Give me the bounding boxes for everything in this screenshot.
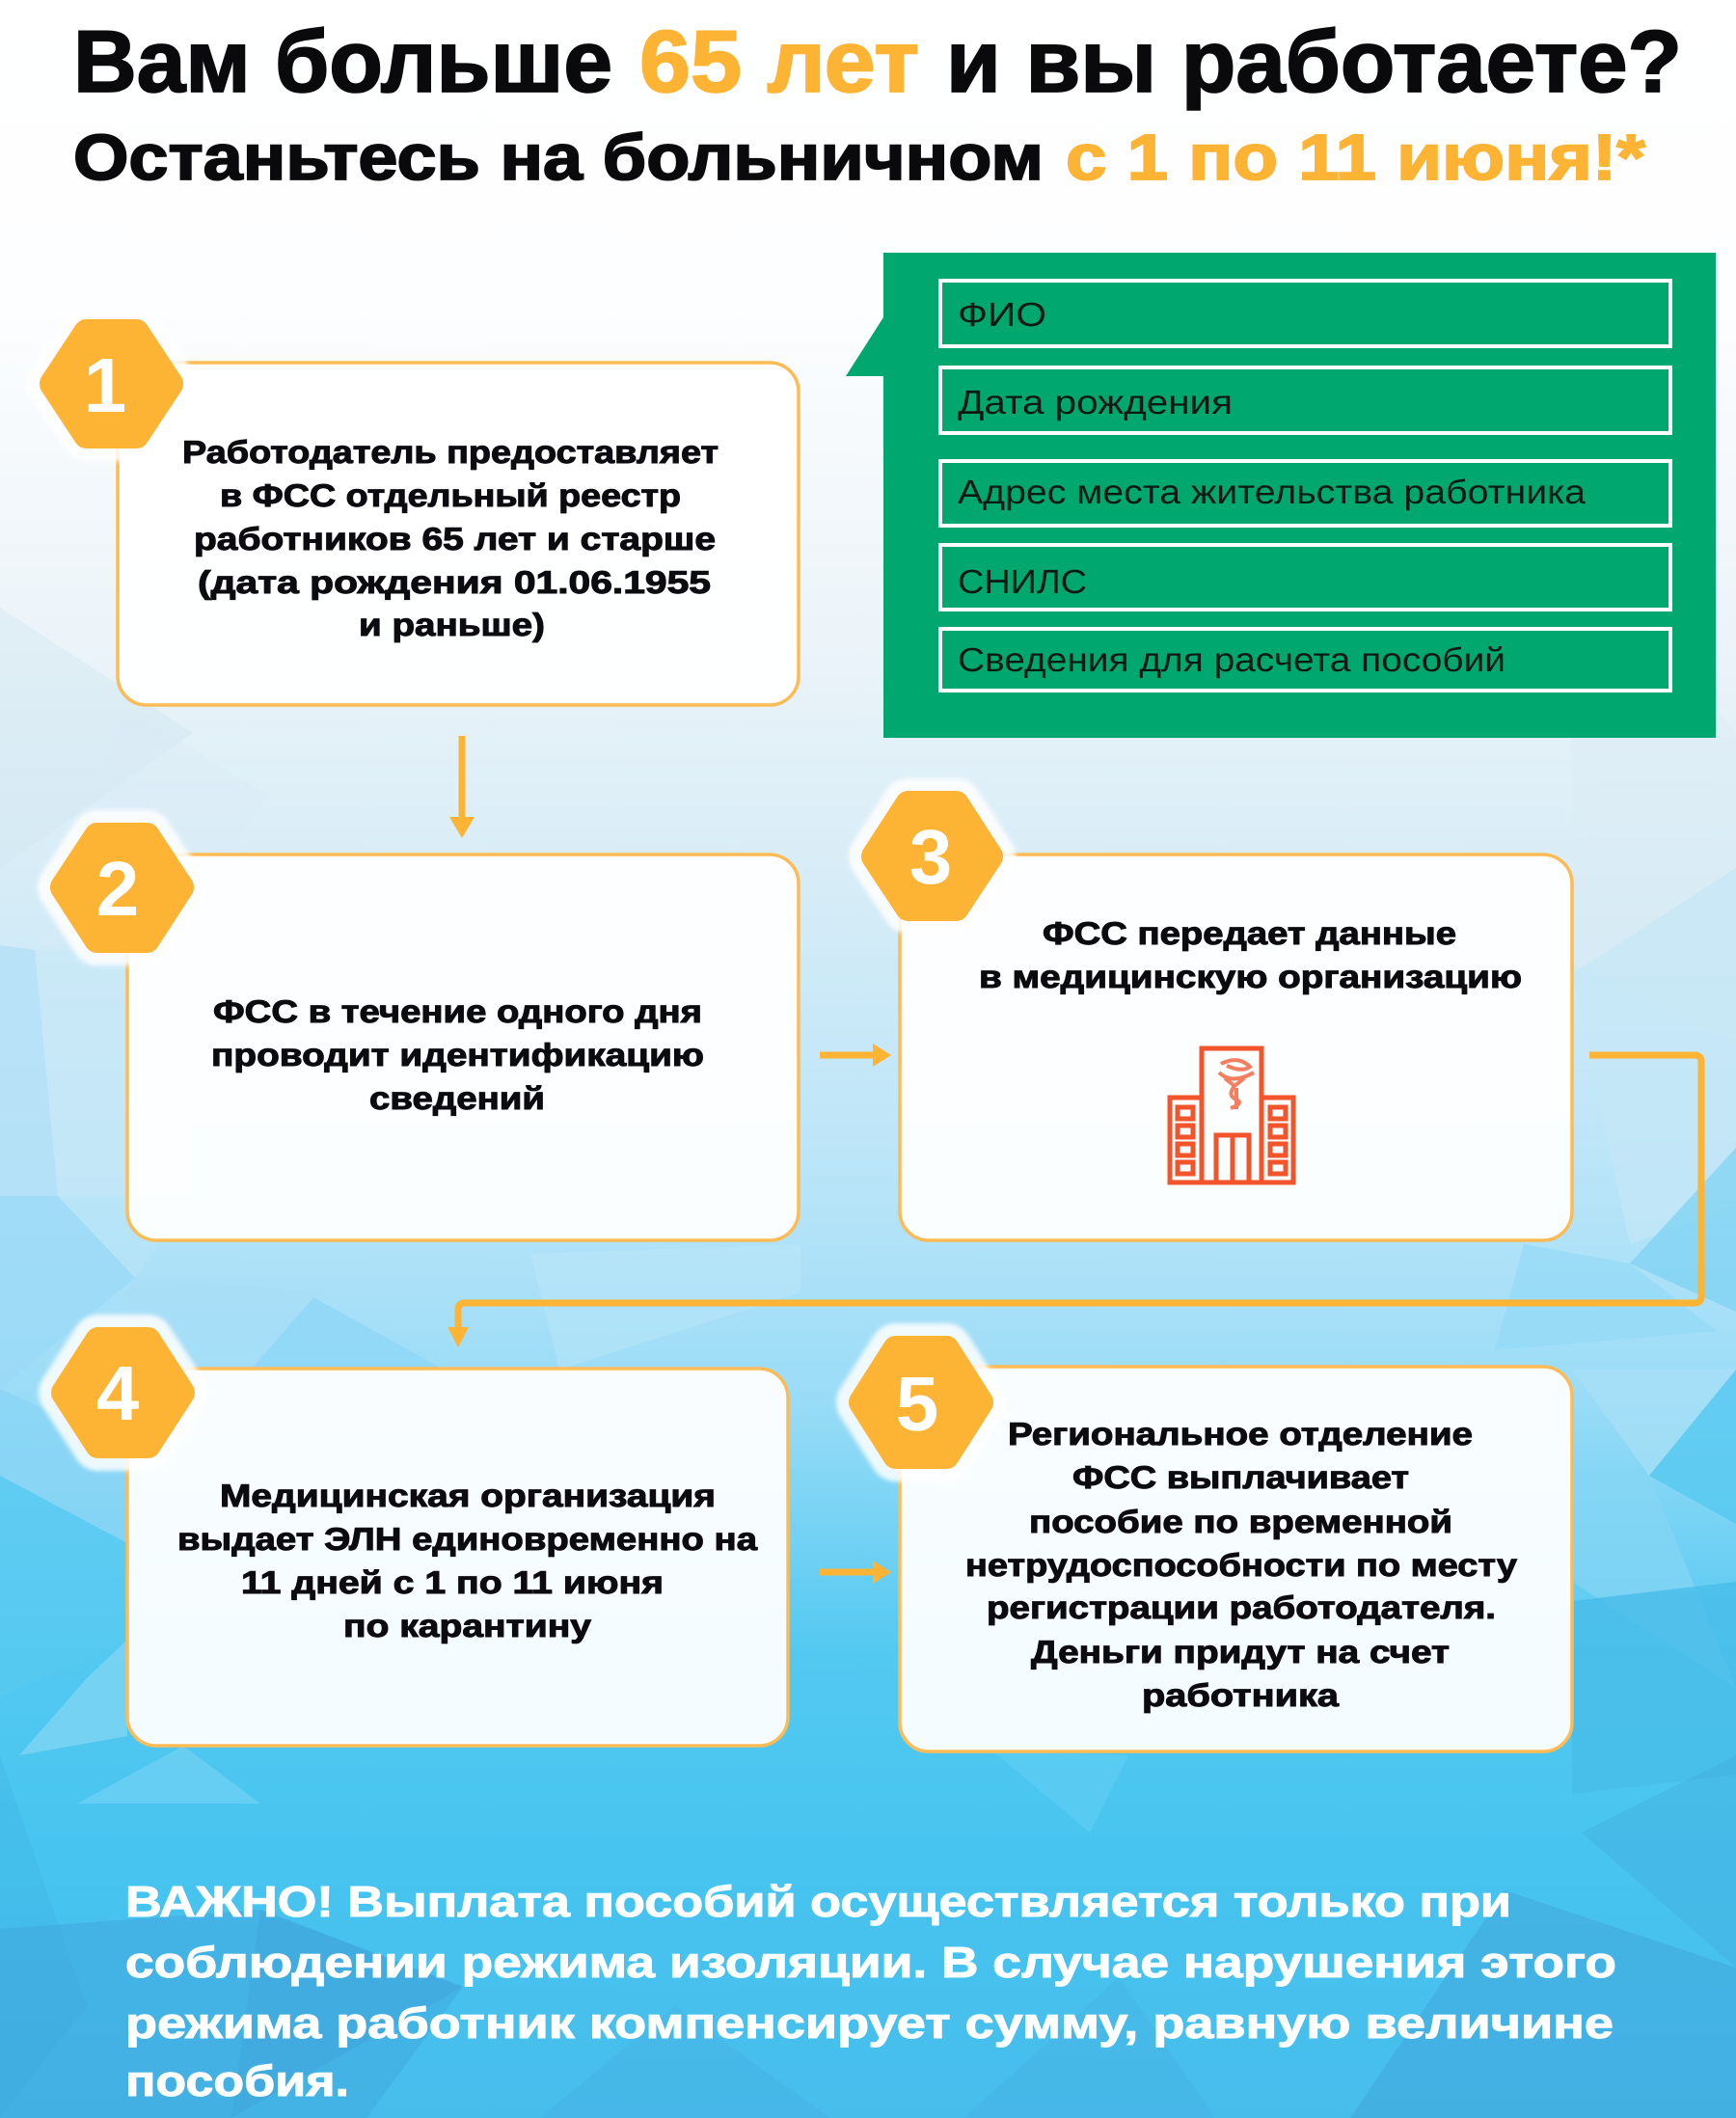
badge 4: 4 — [96, 1350, 140, 1436]
step 4 text: выдает ЭЛН единовременно на — [177, 1521, 758, 1557]
step 3 text — [979, 915, 1522, 994]
step 5 text: работника — [1142, 1677, 1340, 1713]
field: ФИО: ФИО — [958, 296, 1046, 334]
step 5 text: Региональное отделение — [1008, 1416, 1473, 1452]
step 1 text — [182, 434, 719, 642]
step 1 text: работников 65 лет и старше — [194, 521, 716, 557]
heading line 1: и вы работаете? — [946, 14, 1682, 111]
panel: step 5 — [862, 1349, 1572, 1751]
field: benefit details: Сведения для расчета пособий — [958, 641, 1505, 679]
step 4 text — [177, 1478, 758, 1643]
step 4 text: по карантину — [343, 1608, 592, 1643]
heading line 2: с 1 по 11 июня!* — [1066, 122, 1646, 194]
field: date of birth: Дата рождения — [958, 384, 1233, 421]
step 1 text: и раньше) — [359, 607, 545, 642]
field: date of birth — [940, 367, 1670, 433]
badge 3: 3 — [909, 814, 952, 900]
field: ФИО — [940, 281, 1670, 346]
heading line 1 — [73, 14, 1682, 111]
arrow: step 3 to 4 — [448, 1055, 1701, 1347]
step 2 text: ФСС в течение одного дня — [213, 993, 702, 1029]
step 3 text: ФСС передает данные — [1043, 915, 1456, 951]
heading line 2 — [73, 122, 1646, 194]
step 5 text: регистрации работодателя. — [987, 1589, 1496, 1625]
panel: step 4 — [65, 1341, 788, 1746]
step 1 text: Работодатель предоставляет — [182, 434, 719, 470]
callout: important note — [125, 1877, 1616, 2105]
step 5 text: пособие по временной — [1029, 1504, 1452, 1539]
badge 5 — [862, 1349, 980, 1455]
badge 2 — [64, 836, 180, 939]
step 5 text: Деньги придут на счет — [1031, 1634, 1450, 1670]
step 5 text — [965, 1416, 1518, 1713]
panel: step 1 — [53, 333, 799, 705]
field: СНИЛС — [940, 545, 1670, 610]
step 2 text — [211, 993, 704, 1116]
badge 1: 1 — [84, 342, 126, 428]
step 5 text: нетрудоспособности по месту — [965, 1547, 1518, 1583]
arrow: step 1 to 2 — [449, 736, 475, 838]
field: address — [940, 461, 1670, 526]
callout: important note: соблюдении режима изоляции. В случае нарушения этого — [125, 1938, 1616, 1987]
arrow: step 2 to 3 — [820, 1044, 891, 1067]
badge 1 — [53, 333, 170, 435]
step 5 text: ФСС выплачивает — [1072, 1459, 1409, 1495]
title — [73, 14, 1682, 194]
arrow: step 4 to 5 — [820, 1561, 891, 1584]
badge 4 — [65, 1341, 181, 1445]
step 1 text: в ФСС отдельный реестр — [220, 477, 681, 513]
step 4 text: Медицинская организация — [220, 1478, 716, 1513]
badge 5: 5 — [896, 1361, 938, 1447]
step 4 text: 11 дней с 1 по 11 июня — [241, 1564, 664, 1600]
step 2 text: сведений — [369, 1080, 545, 1116]
panel: step 3 — [875, 804, 1572, 1240]
callout: important note: ВАЖНО! Выплата пособий осуществляется только при — [125, 1877, 1511, 1926]
badge 2: 2 — [96, 846, 139, 932]
callout: important note: режима работник компенсирует сумму, равную величине — [125, 1998, 1614, 2048]
callout: important note: пособия. — [125, 2056, 349, 2105]
heading line 1: Вам больше — [73, 14, 612, 111]
heading line 1: 65 лет — [639, 14, 919, 111]
heading line 2: Останьтесь на больничном — [73, 122, 1044, 194]
panel: required data (green) — [846, 253, 1716, 738]
step 1 text: (дата рождения 01.06.1955 — [198, 564, 711, 600]
badge 3 — [875, 804, 990, 908]
field: address: Адрес места жительства работника — [958, 474, 1587, 511]
step 2 text: проводит идентификацию — [211, 1037, 704, 1073]
panel: step 2 — [64, 836, 799, 1240]
field: benefit details — [940, 629, 1670, 691]
step 3 text: в медицинскую организацию — [979, 959, 1522, 994]
field: СНИЛС: СНИЛС — [958, 563, 1087, 601]
icon: hospital building — [1170, 1048, 1293, 1182]
